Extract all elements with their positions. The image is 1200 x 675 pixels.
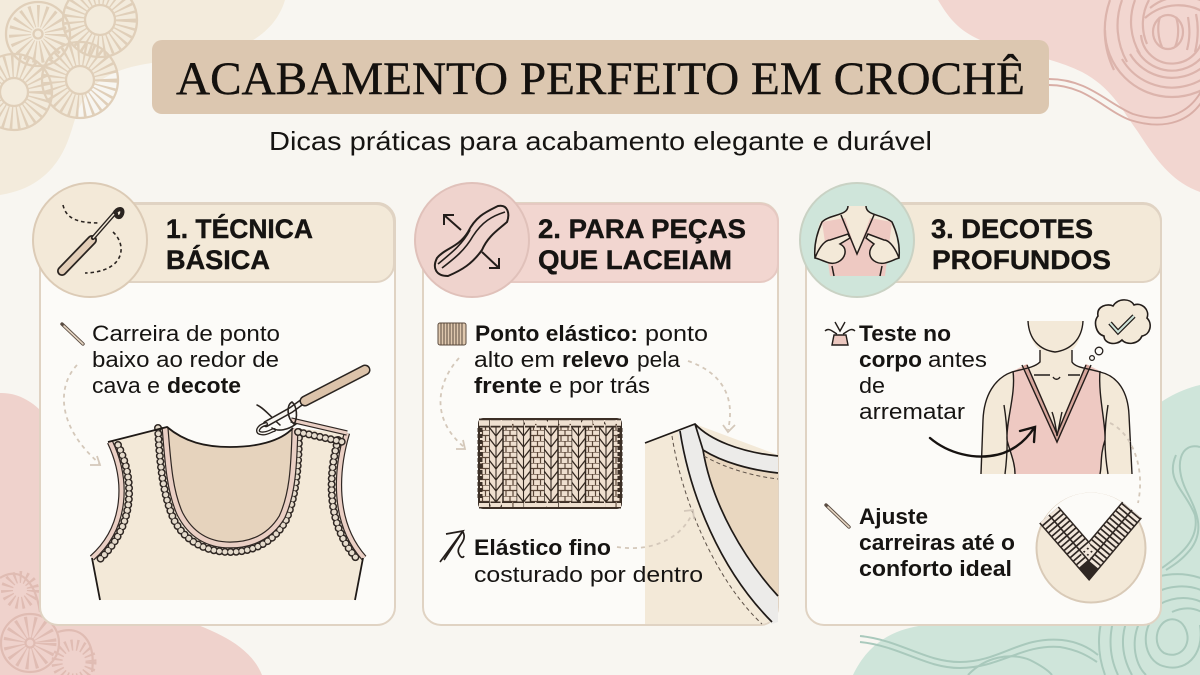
tip text: teste no corpo: de <box>859 373 885 398</box>
small hook icon <box>62 324 83 344</box>
tip text: Carreira de ponto <box>92 321 280 346</box>
panel: decotes profundos <box>800 183 1161 625</box>
yarn ball bottom-right <box>860 446 1200 675</box>
icon circle: crochet hook <box>33 183 147 297</box>
small hook icon <box>826 505 849 527</box>
header band <box>90 204 394 282</box>
tip text <box>92 321 280 398</box>
background blob: cream top-left <box>0 0 285 195</box>
garment close-up with elastic <box>645 424 778 624</box>
tip text: teste no corpo: arrematar <box>859 399 966 424</box>
heading: 3. DECOTES <box>931 214 1093 244</box>
heading: QUE LACEIAM <box>538 245 732 275</box>
heading <box>931 214 1111 275</box>
tip text: ponto elástico <box>474 321 708 398</box>
tank top illustration <box>92 420 364 600</box>
large crochet hook <box>257 370 365 433</box>
tip text: ponto elástico: pela <box>637 347 680 372</box>
dashed arrow <box>64 365 100 465</box>
icon circle: hands at neckline <box>800 183 914 297</box>
tip text: ponto elástico: Ponto elástico: <box>475 321 638 346</box>
panel: para peças que laceiam <box>415 183 778 625</box>
tip text: teste no corpo: corpo <box>859 347 922 372</box>
panel: técnica básica <box>33 183 395 625</box>
heading: BÁSICA <box>166 244 270 275</box>
body fit icon <box>825 322 855 345</box>
black arrow <box>930 427 1035 457</box>
subtitle: Dicas práticas para acabamento elegante e durável <box>269 126 932 156</box>
yarn ball top-right <box>1105 0 1200 97</box>
icon circle: stretched fabric <box>415 183 529 297</box>
tip text: ponto elástico: frente <box>474 373 542 398</box>
doily bottom-left <box>0 574 93 675</box>
heading: 1. TÉCNICA <box>166 213 313 244</box>
header band <box>472 204 778 282</box>
title banner <box>152 40 1049 114</box>
heading: 2. PARA PEÇAS <box>538 214 746 244</box>
tip text: ponto elástico: e por trás <box>549 373 650 398</box>
heading <box>538 214 746 275</box>
tip text: ponto elástico: relevo <box>562 347 629 372</box>
tip text: ajuste carreiras: carreiras até o <box>859 530 1015 555</box>
dashed connector <box>1110 423 1140 503</box>
panel card <box>423 203 778 625</box>
heading <box>166 213 313 275</box>
woman wearing deep V top <box>980 321 1132 474</box>
doily top-left <box>0 0 137 130</box>
panel card <box>40 203 395 625</box>
tip text: ajuste carreiras: Ajuste <box>859 504 928 529</box>
title text: ACABAMENTO PERFEITO EM CROCHÊ <box>176 53 1025 105</box>
tip text: baixo ao redor de <box>92 347 279 372</box>
yarn tail top-right <box>1049 79 1200 125</box>
background blob: pink top-right <box>938 0 1200 192</box>
dashed arrow to neckline <box>688 361 735 432</box>
thought bubble with check <box>1090 300 1150 360</box>
background blob: pink bottom-left <box>0 393 262 675</box>
tip text: decote <box>167 373 241 398</box>
rib stitch swatch <box>479 419 621 508</box>
tip text: teste no corpo: antes <box>928 347 987 372</box>
tip text: teste no corpo: Teste no <box>859 321 951 346</box>
dashed arrow to elastic <box>617 510 694 548</box>
tip text: teste no corpo <box>859 321 987 424</box>
dashed arrow to rib swatch <box>440 358 465 449</box>
tip text: ponto elástico: alto em <box>474 347 555 372</box>
tip text: elástico fino: costurado por dentro <box>474 562 703 587</box>
rib stitch icon <box>438 323 466 345</box>
background blob: mint bottom-right <box>853 385 1200 675</box>
tip text: ponto elástico: ponto <box>645 321 708 346</box>
panel card <box>806 203 1161 625</box>
tip text: cava e <box>92 373 160 398</box>
neckline detail circle <box>1036 493 1146 602</box>
needle icon <box>440 531 464 562</box>
tip text: ajuste carreiras: conforto ideal <box>859 556 1012 581</box>
tip text: elástico fino <box>474 535 703 587</box>
header band <box>857 204 1161 282</box>
tip text: elástico fino: Elástico fino <box>474 535 611 560</box>
tip text: ajuste carreiras <box>859 504 1015 581</box>
heading: PROFUNDOS <box>932 245 1111 275</box>
